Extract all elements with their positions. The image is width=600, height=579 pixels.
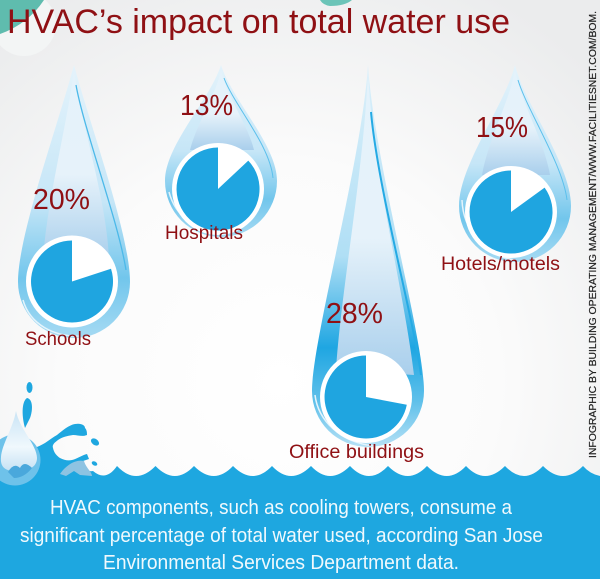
label: office buildings: Office buildings — [289, 441, 424, 463]
body text — [20, 497, 543, 574]
label: schools: Schools — [25, 328, 91, 350]
line 1: HVAC components, such as cooling towers, consume a — [50, 497, 513, 519]
pie: 20% — [26, 236, 118, 328]
pie: 28% — [320, 351, 412, 443]
label: 28%: 28% — [326, 298, 383, 330]
water band — [0, 462, 600, 579]
drop: hotels/motels — [459, 65, 571, 262]
label: hospitals: Hospitals — [165, 222, 243, 244]
decorative teal corner shapes — [0, 0, 352, 56]
line 2: significant percentage of total water used, according San Jose — [20, 525, 543, 547]
pie: 13% — [172, 143, 264, 235]
source credit: INFOGRAPHIC BY BUILDING OPERATING MANAGEMENT/WWW.FACILITIESNET.COM/BOM. — [588, 11, 599, 458]
label: 13%: 13% — [180, 90, 233, 122]
label: hotels/motels: Hotels/motels — [441, 253, 560, 275]
pie: 15% — [465, 166, 557, 258]
icon: splash — [0, 382, 100, 486]
label: 15%: 15% — [476, 112, 528, 144]
drop: schools — [18, 65, 130, 338]
title: HVAC’s impact on total water use — [7, 3, 510, 41]
line 3: Environmental Services Department data. — [103, 552, 459, 574]
drop: office buildings — [312, 65, 424, 447]
label: 20%: 20% — [33, 184, 90, 216]
drop: hospitals — [165, 65, 277, 237]
